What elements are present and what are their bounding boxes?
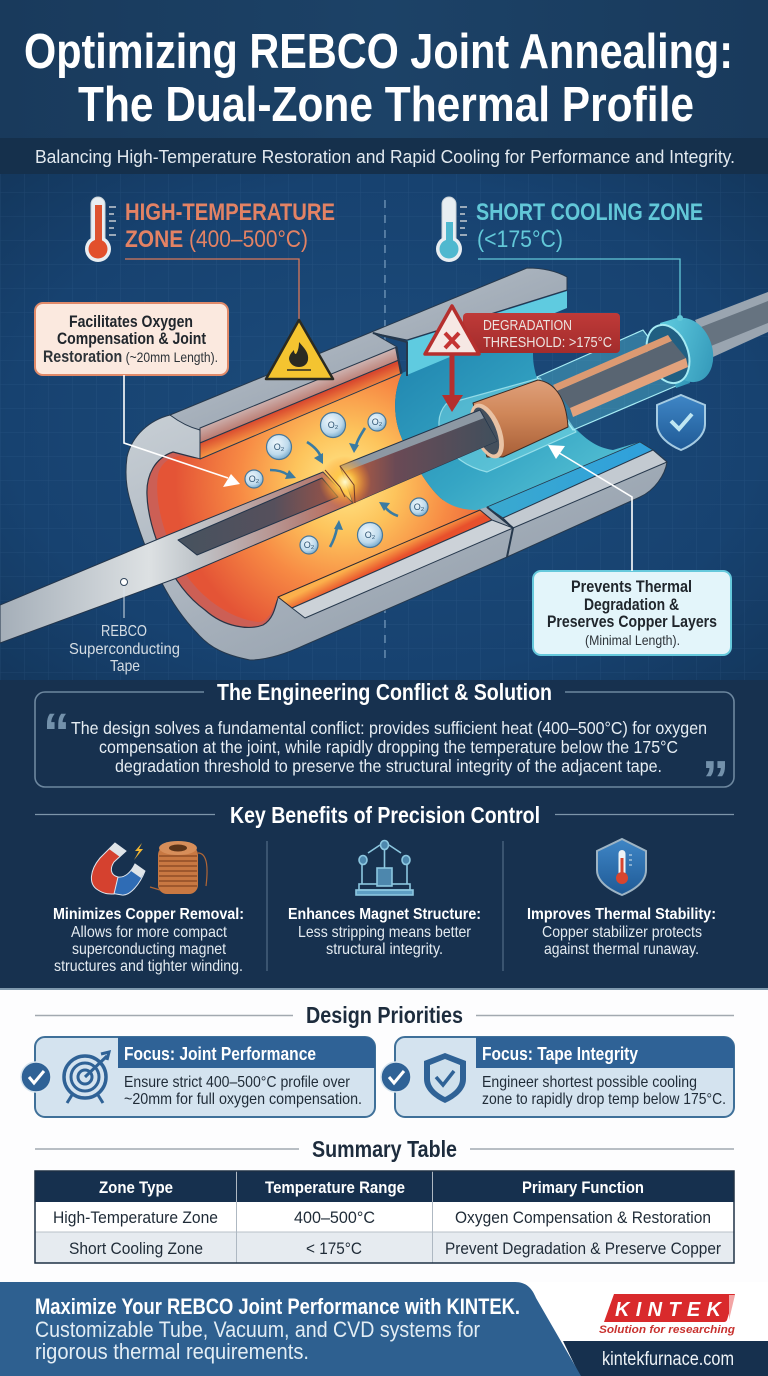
heading: short cooling zone: (<175°C) xyxy=(477,226,563,253)
benefit: copper removal: Minimizes Copper Removal: xyxy=(53,906,244,923)
warning: degradation threshold: DEGRADATION xyxy=(483,318,572,334)
panel: white section xyxy=(0,988,768,1283)
benefit: thermal stability: Improves Thermal Stability: xyxy=(527,906,716,923)
label: REBCO tape: REBCO xyxy=(101,623,147,640)
card: joint performance: Focus: Joint Performance xyxy=(124,1044,316,1064)
callout: hot zone xyxy=(35,303,228,375)
thermometer: hot xyxy=(85,197,116,262)
rod between joint and sleeve xyxy=(340,410,497,503)
subtitle band: Balancing High-Temperature Restoration and Rapid Cooling for Performance and Integrity. xyxy=(35,146,735,167)
panel: hero diagram xyxy=(0,174,768,680)
KINTEK logo: KINTEK xyxy=(615,1299,723,1321)
oxygen labels: O₂ xyxy=(249,474,260,484)
heading: summary table: Summary Table xyxy=(312,1136,457,1162)
table header: Primary Function xyxy=(522,1178,644,1197)
table row: high temperature: 400–500°C xyxy=(294,1208,375,1227)
conflict text: compensation at the joint, while rapidly dropping the temperature below the 175°C xyxy=(99,737,678,757)
benefit: magnet structure: Less stripping means better xyxy=(298,924,472,941)
oxygen labels: O₂ xyxy=(274,442,285,452)
card: joint performance: ~20mm for full oxygen compensation. xyxy=(124,1091,362,1108)
footer call to action xyxy=(0,1282,581,1376)
benefit: magnet structure xyxy=(288,906,481,958)
glass tube xyxy=(537,330,683,430)
summary table xyxy=(35,1171,734,1263)
card: joint performance: Ensure strict 400–500°C profile over xyxy=(124,1074,351,1091)
copper and dark tape strips xyxy=(553,335,688,417)
table row: short cooling: < 175°C xyxy=(306,1239,362,1258)
benefit: thermal stability: Copper stabilizer protects xyxy=(542,924,702,941)
inner rim xyxy=(147,452,300,627)
lower cool cut face xyxy=(487,442,653,518)
icon: check badge xyxy=(21,1062,51,1092)
outer ring and lower shell xyxy=(126,415,667,660)
header panel xyxy=(0,0,768,139)
conflict text xyxy=(71,718,707,776)
KINTEK logo: Solution for researching xyxy=(599,1324,735,1336)
leader: cool zone xyxy=(478,259,683,321)
card: joint performance xyxy=(21,1037,375,1117)
panel: conflict and benefits xyxy=(0,679,768,988)
card: tape integrity: zone to rapidly drop temp below 175°C. xyxy=(482,1091,726,1108)
callout: cool zone: Prevents Thermal xyxy=(571,578,692,596)
icon: blue shield check xyxy=(657,395,705,450)
oxygen labels: O₂ xyxy=(414,502,425,512)
footer call to action: Customizable Tube, Vacuum, and CVD systems for xyxy=(35,1317,480,1342)
cooling end ring xyxy=(639,311,722,389)
table row: high temperature: Oxygen Compensation & Restoration xyxy=(455,1208,711,1227)
title: The Dual-Zone Thermal Profile xyxy=(78,78,694,132)
leader: hot zone xyxy=(125,259,299,320)
quote marks: ” xyxy=(702,750,729,810)
icon: magnet and coil xyxy=(91,841,207,895)
thermometer: cool xyxy=(436,197,467,262)
subtitle band xyxy=(0,138,768,174)
conflict heading: The Engineering Conflict & Solution xyxy=(217,679,552,705)
callout: cool zone: (Minimal Length). xyxy=(585,632,680,648)
warning: degradation threshold: THRESHOLD: >175°C xyxy=(483,335,612,351)
table row: high temperature xyxy=(53,1208,711,1227)
footer call to action: Maximize Your REBCO Joint Performance with KINTEK. xyxy=(35,1294,520,1319)
table row: short cooling: Prevent Degradation & Preserve Copper xyxy=(445,1239,721,1258)
cross-section furnace illustration xyxy=(0,268,768,660)
icon: shield thermometer xyxy=(597,839,646,895)
table row: short cooling: Short Cooling Zone xyxy=(69,1239,203,1258)
table row: high temperature: High-Temperature Zone xyxy=(53,1208,218,1227)
card: tape integrity: Engineer shortest possible cooling xyxy=(482,1074,697,1091)
inward oxygen arrows xyxy=(270,428,398,547)
label: REBCO tape: Superconducting xyxy=(69,641,180,658)
hot cavity xyxy=(157,373,480,622)
card: tape integrity xyxy=(381,1037,734,1117)
benefit: copper removal xyxy=(53,906,244,975)
benefit: magnet structure: structural integrity. xyxy=(326,941,443,958)
callout: hot zone: Restoration (~20mm Length). xyxy=(43,348,218,366)
heading: high temperature zone: HIGH-TEMPERATURE xyxy=(125,199,335,226)
cool glow around sleeve xyxy=(439,378,576,472)
heading: design priorities: Design Priorities xyxy=(306,1002,463,1028)
label: REBCO tape xyxy=(69,578,180,675)
benefit: copper removal: structures and tighter winding. xyxy=(54,958,243,975)
conflict text: degradation threshold to preserve the structural integrity of the adjacent tape. xyxy=(115,756,662,776)
icon: target xyxy=(64,1052,109,1103)
upper cool cut face xyxy=(407,291,567,375)
lower hot cut face xyxy=(278,510,492,608)
heading: high temperature zone: ZONE (400–500°C) xyxy=(125,226,308,253)
footer url strip xyxy=(563,1341,768,1376)
oxygen labels: O₂ xyxy=(372,417,383,427)
oxygen bubbles xyxy=(245,412,428,554)
table header: Temperature Range xyxy=(265,1178,405,1197)
arrow: cool callout to copper xyxy=(548,445,632,571)
oxygen labels: O₂ xyxy=(365,530,376,540)
conflict box xyxy=(35,679,734,810)
oxygen labels: O₂ xyxy=(328,420,339,430)
card: tape integrity: Focus: Tape Integrity xyxy=(482,1044,638,1064)
quote marks xyxy=(43,703,729,810)
oxygen labels xyxy=(249,417,425,550)
glowing joint xyxy=(319,456,371,508)
tape xyxy=(0,472,353,643)
exit tape xyxy=(695,292,768,357)
icon: check badge xyxy=(381,1062,411,1092)
upper hot cut face xyxy=(200,347,402,459)
label: REBCO tape: Tape xyxy=(110,658,140,675)
copper sleeve xyxy=(463,380,568,463)
icon: shield check xyxy=(424,1053,466,1103)
upper shell top surface xyxy=(170,268,567,430)
warning: degradation threshold xyxy=(425,306,620,412)
heading: high temperature zone xyxy=(125,199,335,253)
KINTEK logo xyxy=(599,1294,735,1336)
cool cavity xyxy=(395,320,640,510)
title xyxy=(24,25,733,132)
footer xyxy=(0,1282,768,1376)
heading: short cooling zone: SHORT COOLING ZONE xyxy=(476,199,703,226)
icon: magnet structure xyxy=(356,840,413,895)
footer call to action: rigorous thermal requirements. xyxy=(35,1339,309,1364)
quote marks: “ xyxy=(43,703,70,763)
oxygen labels: O₂ xyxy=(304,540,315,550)
benefit: thermal stability xyxy=(527,906,716,958)
conflict text: The design solves a fundamental conflict: provides sufficient heat (400–500°C) for oxygen xyxy=(71,718,707,738)
heading: short cooling zone xyxy=(476,199,703,253)
benefit: magnet structure: Enhances Magnet Structure: xyxy=(288,906,481,923)
callout: cool zone: Preserves Copper Layers xyxy=(547,613,717,631)
callout: hot zone: Facilitates Oxygen xyxy=(69,313,193,331)
callout: cool zone xyxy=(533,571,731,655)
callout: hot zone: Compensation & Joint xyxy=(57,330,206,348)
callout: cool zone: Degradation & xyxy=(584,596,679,614)
benefit: thermal stability: against thermal runaway. xyxy=(544,941,699,958)
benefit: copper removal: Allows for more compact xyxy=(71,924,227,941)
table header: Zone Type xyxy=(99,1178,173,1197)
benefit: copper removal: superconducting magnet xyxy=(72,941,226,958)
footer url strip: kintekfurnace.com xyxy=(602,1349,734,1370)
table header xyxy=(99,1178,644,1197)
table row: short cooling xyxy=(69,1239,721,1258)
shell joint xyxy=(373,333,407,376)
benefits heading: Key Benefits of Precision Control xyxy=(230,802,540,828)
dark tape insert left xyxy=(178,478,338,555)
icon: flame warning xyxy=(266,320,333,379)
arrow: hot callout to joint xyxy=(124,375,240,487)
